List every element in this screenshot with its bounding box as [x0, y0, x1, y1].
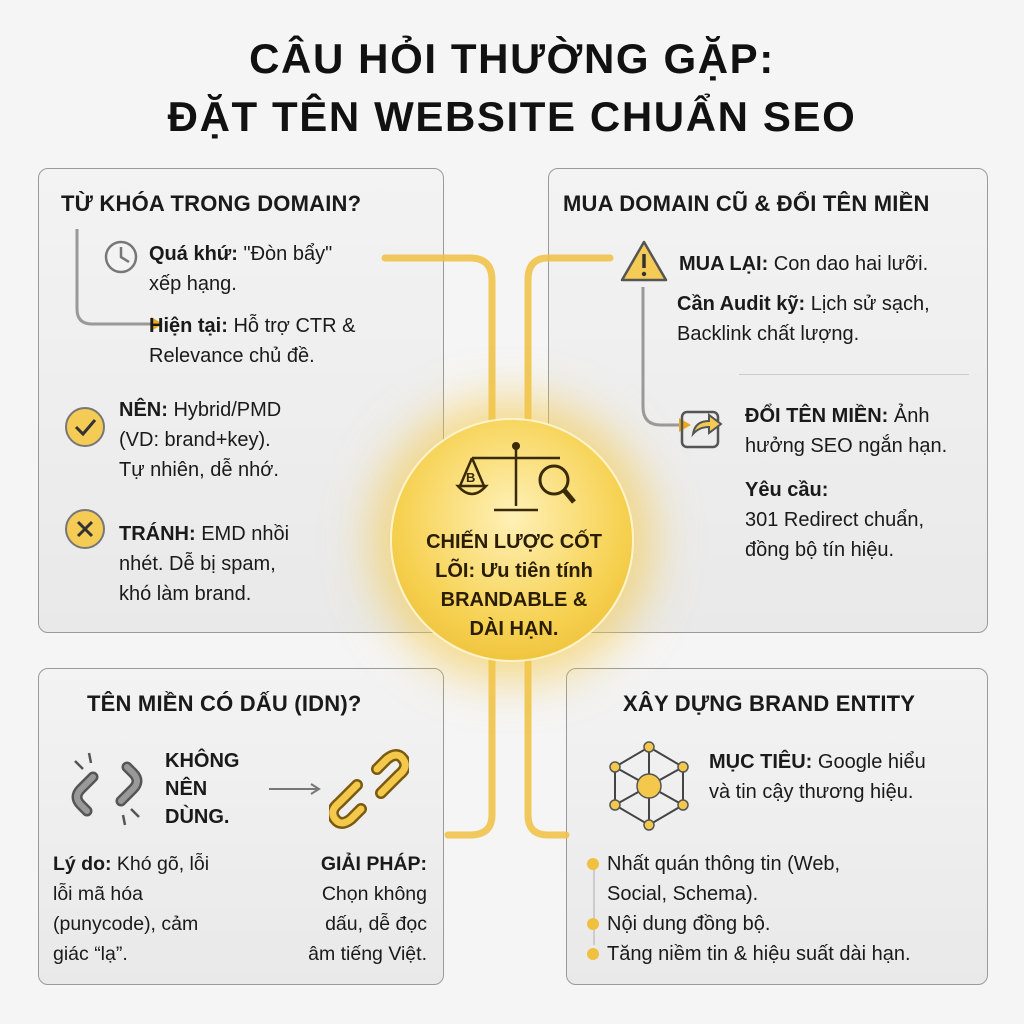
- center circle: LÕI: Ưu tiên tính: [435, 560, 593, 582]
- panel: IDN: DÙNG.: [165, 806, 229, 828]
- center circle: [390, 418, 634, 662]
- panel: keyword in domain: khó làm brand.: [119, 583, 251, 605]
- panel: IDN: NÊN: [165, 778, 207, 800]
- panel: keyword in domain: Tự nhiên, dễ nhớ.: [119, 459, 279, 481]
- panel: IDN: TÊN MIỀN CÓ DẤU (IDN)?: [87, 691, 362, 716]
- bullet list: [587, 853, 911, 965]
- center circle: CHIẾN LƯỢC CỐT: [426, 531, 602, 553]
- panel: IDN: lỗi mã hóa: [53, 883, 143, 905]
- panel: keyword in domain: Hiện tại: Hỗ trợ CTR &: [149, 315, 355, 337]
- panel: old domain: [548, 168, 988, 633]
- center circle: DÀI HẠN.: [470, 618, 558, 640]
- panel: IDN: Lý do: Khó gõ, lỗi: [53, 853, 209, 875]
- panel: old domain: ĐỔI TÊN MIỀN: Ảnh: [745, 405, 930, 427]
- panel: IDN: KHÔNG: [165, 750, 239, 772]
- panel: IDN: giác “lạ”.: [53, 943, 128, 965]
- panel: keyword in domain: Quá khứ: "Đòn bẩy": [149, 243, 332, 265]
- bullet list: Tăng niềm tin & hiệu suất dài hạn.: [607, 943, 911, 965]
- icon: broken chain: [72, 752, 142, 826]
- bullet list: Nội dung đồng bộ.: [607, 913, 770, 935]
- panel: old domain: Yêu cầu:: [745, 479, 828, 501]
- panel: brand entity: và tin cậy thương hiệu.: [709, 781, 913, 803]
- panel: IDN: (punycode), cảm: [53, 913, 198, 935]
- icon: cross: [65, 509, 105, 549]
- icon: warning: [620, 240, 668, 282]
- icon: scale: [455, 442, 576, 512]
- panel: old domain: 301 Redirect chuẩn,: [745, 509, 924, 531]
- panel: IDN: âm tiếng Việt.: [308, 943, 427, 965]
- icon: network: [609, 741, 689, 831]
- panel: IDN: [38, 668, 444, 985]
- panel: IDN: dấu, dễ đọc: [325, 913, 427, 935]
- panel: old domain: Cần Audit kỹ: Lịch sử sạch,: [677, 293, 930, 315]
- panel: IDN: Chọn không: [322, 883, 427, 905]
- icon: scale: B: [466, 470, 475, 485]
- panel: keyword in domain: TRÁNH: EMD nhồi: [119, 523, 289, 545]
- panel: keyword in domain: [38, 168, 444, 633]
- icon: check: [65, 407, 105, 447]
- icon: share: [680, 410, 722, 448]
- center circle: BRANDABLE &: [441, 589, 587, 611]
- panel: brand entity: [566, 668, 988, 985]
- panel: old domain: MUA LẠI: Con dao hai lưỡi.: [679, 253, 928, 275]
- timeline arrow: [76, 229, 163, 330]
- panel: old domain: MUA DOMAIN CŨ & ĐỔI TÊN MIỀN: [563, 191, 930, 216]
- bullet list: Social, Schema).: [607, 883, 758, 905]
- panel: IDN: GIẢI PHÁP:: [321, 853, 427, 875]
- panel: brand entity: MỤC TIÊU: Google hiểu: [709, 751, 926, 773]
- panel: keyword in domain: NÊN: Hybrid/PMD: [119, 399, 281, 421]
- title: CÂU HỎI THƯỜNG GẶP:: [249, 35, 775, 82]
- panel: keyword in domain: xếp hạng.: [149, 273, 237, 295]
- bullet list: Nhất quán thông tin (Web,: [607, 853, 840, 875]
- panel: old domain: hưởng SEO ngắn hạn.: [745, 435, 947, 457]
- panel: old domain: Backlink chất lượng.: [677, 323, 859, 345]
- title: [168, 35, 856, 140]
- panel: keyword in domain: Relevance chủ đề.: [149, 345, 315, 367]
- icon: gold chain: [329, 749, 409, 829]
- panel: keyword in domain: (VD: brand+key).: [119, 429, 271, 451]
- title: ĐẶT TÊN WEBSITE CHUẨN SEO: [168, 93, 856, 140]
- panel: old domain: đồng bộ tín hiệu.: [745, 539, 894, 561]
- panel: keyword in domain: TỪ KHÓA TRONG DOMAIN?: [61, 191, 361, 216]
- panel: keyword in domain: nhét. Dễ bị spam,: [119, 553, 276, 575]
- panel: brand entity: XÂY DỰNG BRAND ENTITY: [623, 691, 915, 716]
